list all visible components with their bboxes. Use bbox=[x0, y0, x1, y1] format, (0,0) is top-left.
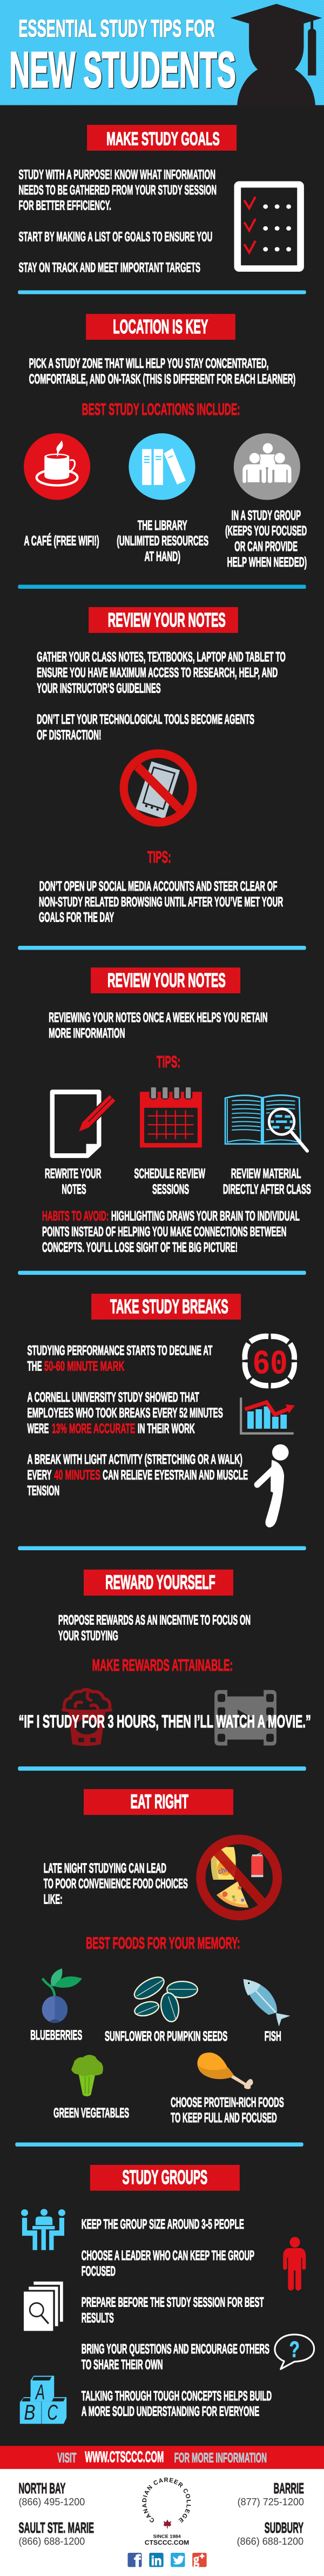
panel: study groups bbox=[20, 2165, 314, 2424]
icon: study group bbox=[234, 433, 300, 500]
contact: sault ste. marie: SAULT STE. MARIE bbox=[18, 2519, 94, 2536]
text: performance decline: THE bbox=[28, 1358, 42, 1374]
text: social media bbox=[39, 878, 283, 925]
footer bbox=[0, 2446, 324, 2576]
text: technological tools: OF DISTRACTION! bbox=[37, 727, 101, 743]
text: late night studying: TO POOR CONVENIENCE FOOD CHOICES bbox=[44, 1876, 188, 1891]
heading: eat right bbox=[84, 1789, 233, 1815]
text: bring questions: TO SHARE THEIR OWN bbox=[82, 2357, 163, 2372]
heading: review your notes: REVIEW YOUR NOTES bbox=[108, 609, 226, 631]
icon: book and magnifier bbox=[225, 1095, 307, 1151]
contact: barrie: (877) 725-1200 bbox=[238, 2496, 304, 2507]
icon: line and bar chart bbox=[241, 1397, 295, 1434]
icon: coffee cup bbox=[24, 433, 90, 500]
text: light activity: EVERY bbox=[28, 1467, 52, 1483]
icon: stretching figure bbox=[257, 1444, 289, 1528]
icon: drumstick bbox=[197, 2053, 253, 2089]
label: schedule review sessions: SCHEDULE REVIEW bbox=[134, 1166, 205, 1181]
panel: make study goals bbox=[18, 125, 306, 294]
label: review material bbox=[223, 1166, 311, 1196]
label: schedule review sessions: SESSIONS bbox=[152, 1181, 189, 1196]
text: performance decline bbox=[28, 1343, 212, 1374]
icon: question bubble bbox=[275, 2335, 314, 2369]
contact: north bay: (866) 495-1200 bbox=[18, 2496, 85, 2507]
icon: film strip bbox=[214, 1690, 276, 1746]
callout: habits to avoid: HABITS TO AVOID: bbox=[42, 1208, 109, 1223]
heading: location is key: LOCATION IS KEY bbox=[113, 316, 208, 338]
label: blueberries: BLUEBERRIES bbox=[30, 2027, 82, 2043]
call to action bar bbox=[0, 2446, 324, 2469]
label: the library bbox=[117, 517, 208, 564]
logo: canadian career college bbox=[142, 2477, 191, 2546]
label: the library: AT HAND) bbox=[144, 549, 180, 564]
contact panel bbox=[0, 2469, 324, 2576]
heading: eat right: EAT RIGHT bbox=[130, 1791, 188, 1812]
panel: location is key bbox=[18, 314, 307, 589]
icon: abc blocks: B bbox=[24, 2400, 35, 2424]
text: pick a study zone bbox=[29, 355, 295, 387]
contact: north bay: NORTH BAY bbox=[18, 2480, 65, 2497]
text: light activity: 40 MINUTES bbox=[54, 1467, 100, 1483]
contact: north bay bbox=[18, 2480, 85, 2507]
icon: abc blocks bbox=[20, 2376, 66, 2424]
label: rewrite your notes: NOTES bbox=[62, 1181, 86, 1196]
text: choose a leader: FOCUSED bbox=[82, 2263, 116, 2278]
text: late night studying: LATE NIGHT STUDYING CAN LEAD bbox=[44, 1860, 166, 1875]
contact: sault ste. marie: (866) 688-1200 bbox=[18, 2535, 85, 2547]
icon: popcorn bbox=[63, 1690, 111, 1746]
panel: review your notes (weekly) bbox=[18, 967, 311, 1275]
icon: graduate silhouette bbox=[231, 4, 322, 109]
icon: facebook: f bbox=[134, 2552, 141, 2571]
logo: canadian career college: CTSCCC.COM bbox=[145, 2539, 189, 2546]
label: the library: (UNLIMITED RESOURCES bbox=[117, 533, 208, 548]
icon: broccoli bbox=[71, 2055, 103, 2096]
text: cornell study: WERE bbox=[28, 1421, 49, 1436]
callout: habits to avoid bbox=[42, 1208, 300, 1255]
icon: linkedin: in bbox=[151, 2554, 162, 2568]
logo: canadian career college: CANADIAN CAREER COLLEGE bbox=[142, 2477, 191, 2523]
label: schedule review sessions bbox=[134, 1166, 205, 1196]
label: the library: THE LIBRARY bbox=[138, 517, 187, 533]
heading: study groups: STUDY GROUPS bbox=[123, 2167, 207, 2188]
call to action bar: VISIT bbox=[57, 2450, 77, 2465]
text: performance decline: 50-60 MINUTE MARK bbox=[44, 1358, 124, 1374]
heading: reward yourself bbox=[84, 1570, 233, 1596]
label: green vegetables: GREEN VEGETABLES bbox=[53, 2105, 129, 2121]
panel: take study breaks bbox=[18, 1294, 306, 1550]
heading: take study breaks: TAKE STUDY BREAKS bbox=[110, 1296, 228, 1317]
label: seeds: SUNFLOWER OR PUMPKIN SEEDS bbox=[105, 2028, 227, 2044]
icon: books bbox=[129, 433, 195, 500]
icon: no phone bbox=[124, 754, 193, 822]
label: in a study group bbox=[225, 507, 307, 569]
panel: review your notes (distractions) bbox=[18, 607, 306, 950]
icon: google plus bbox=[192, 2551, 207, 2567]
text: light activity: TENSION bbox=[28, 1483, 59, 1498]
text: cornell study bbox=[28, 1389, 223, 1436]
contact: barrie bbox=[238, 2480, 304, 2507]
text: prepare: RESULTS bbox=[82, 2310, 114, 2325]
icon: google plus: g bbox=[193, 2551, 199, 2567]
social icons bbox=[127, 2551, 207, 2571]
icon: fish bbox=[244, 1979, 291, 2027]
text: talking through bbox=[82, 2388, 272, 2419]
icon: calendar bbox=[140, 1087, 202, 1147]
text: reviewing once a week: MORE INFORMATION bbox=[49, 1025, 125, 1040]
label: protein-rich foods bbox=[171, 2094, 284, 2126]
text: cornell study: 13% MORE ACCURATE bbox=[52, 1421, 135, 1436]
icon: 60 minute timer bbox=[245, 1336, 294, 1385]
label: rewrite your notes: REWRITE YOUR bbox=[45, 1166, 101, 1181]
panel: best foods bbox=[15, 1934, 303, 2147]
heading: take study breaks bbox=[91, 1294, 241, 1320]
text: technological tools bbox=[37, 711, 254, 743]
label: a cafe: A CAFÉ (FREE WIFI!) bbox=[24, 533, 99, 548]
text: reviewing once a week bbox=[49, 1010, 268, 1040]
header banner bbox=[0, 0, 324, 109]
text: choose a leader bbox=[82, 2248, 254, 2278]
icon: group at table bbox=[21, 2209, 65, 2250]
text: gather your class notes bbox=[37, 649, 286, 696]
text: late night studying bbox=[44, 1860, 188, 1907]
logo: canadian career college: SINCE 1984 bbox=[153, 2534, 181, 2539]
icon: leader person bbox=[283, 2237, 306, 2291]
label: rewrite your notes bbox=[45, 1166, 101, 1196]
icon: checklist bbox=[238, 184, 301, 268]
heading: make study goals bbox=[87, 125, 237, 151]
subheading: tips: TIPS: bbox=[147, 848, 171, 866]
text: bring questions bbox=[82, 2341, 269, 2372]
text: prepare bbox=[82, 2295, 264, 2325]
icon: google plus: + bbox=[200, 2552, 205, 2561]
icon: seeds bbox=[131, 1973, 198, 2023]
heading: review your notes bbox=[89, 607, 238, 633]
text: cornell study: IN THEIR WORK bbox=[138, 1421, 195, 1436]
text: gather your class notes: YOUR INSTRUCTOR’S GUIDELINES bbox=[37, 681, 161, 696]
icon: question bubble: ? bbox=[289, 2337, 300, 2362]
list: study group tips bbox=[20, 2237, 314, 2424]
contact: sudbury: (866) 688-1200 bbox=[237, 2535, 303, 2547]
icon: facebook bbox=[127, 2552, 141, 2571]
icon: no junk food: chips bbox=[217, 1862, 235, 1876]
icon: 60 minute timer: 60 bbox=[253, 1345, 288, 1384]
panel: eat right bbox=[44, 1789, 278, 1915]
icon: no junk food bbox=[201, 1840, 278, 1915]
icon: abc blocks: A bbox=[35, 2380, 45, 2404]
label: fish: FISH bbox=[265, 2028, 281, 2044]
icon: twitter bbox=[171, 2553, 185, 2567]
contact: sudbury bbox=[237, 2519, 303, 2547]
icon: abc blocks: C bbox=[47, 2400, 58, 2424]
text: study with a purpose: FOR BETTER EFFICIENCY. bbox=[18, 198, 111, 213]
heading: make study goals: MAKE STUDY GOALS bbox=[106, 129, 220, 149]
icon: note and pencil bbox=[52, 1092, 116, 1155]
text: late night studying: LIKE: bbox=[44, 1892, 63, 1907]
heading: location is key bbox=[86, 314, 235, 340]
text: propose rewards bbox=[58, 1612, 251, 1643]
panel: reward yourself bbox=[18, 1570, 311, 1771]
text: study with a purpose bbox=[18, 167, 217, 213]
text: light activity bbox=[28, 1451, 248, 1498]
call to action bar: WWW.CTSCCC.COM bbox=[85, 2449, 164, 2466]
heading: study groups bbox=[90, 2165, 240, 2191]
text: social media: GOALS FOR THE DAY bbox=[39, 910, 114, 925]
contact: sault ste. marie bbox=[18, 2519, 94, 2547]
subheading: tips: TIPS: bbox=[157, 1053, 180, 1071]
heading: review your notes: REVIEW YOUR NOTES bbox=[107, 970, 226, 991]
text: propose rewards: YOUR STUDYING bbox=[58, 1628, 118, 1643]
heading: reward yourself: REWARD YOURSELF bbox=[105, 1571, 215, 1593]
heading: review your notes bbox=[91, 967, 240, 993]
icon: stacked papers bbox=[24, 2282, 63, 2331]
icon: blueberry bbox=[42, 1968, 82, 2023]
